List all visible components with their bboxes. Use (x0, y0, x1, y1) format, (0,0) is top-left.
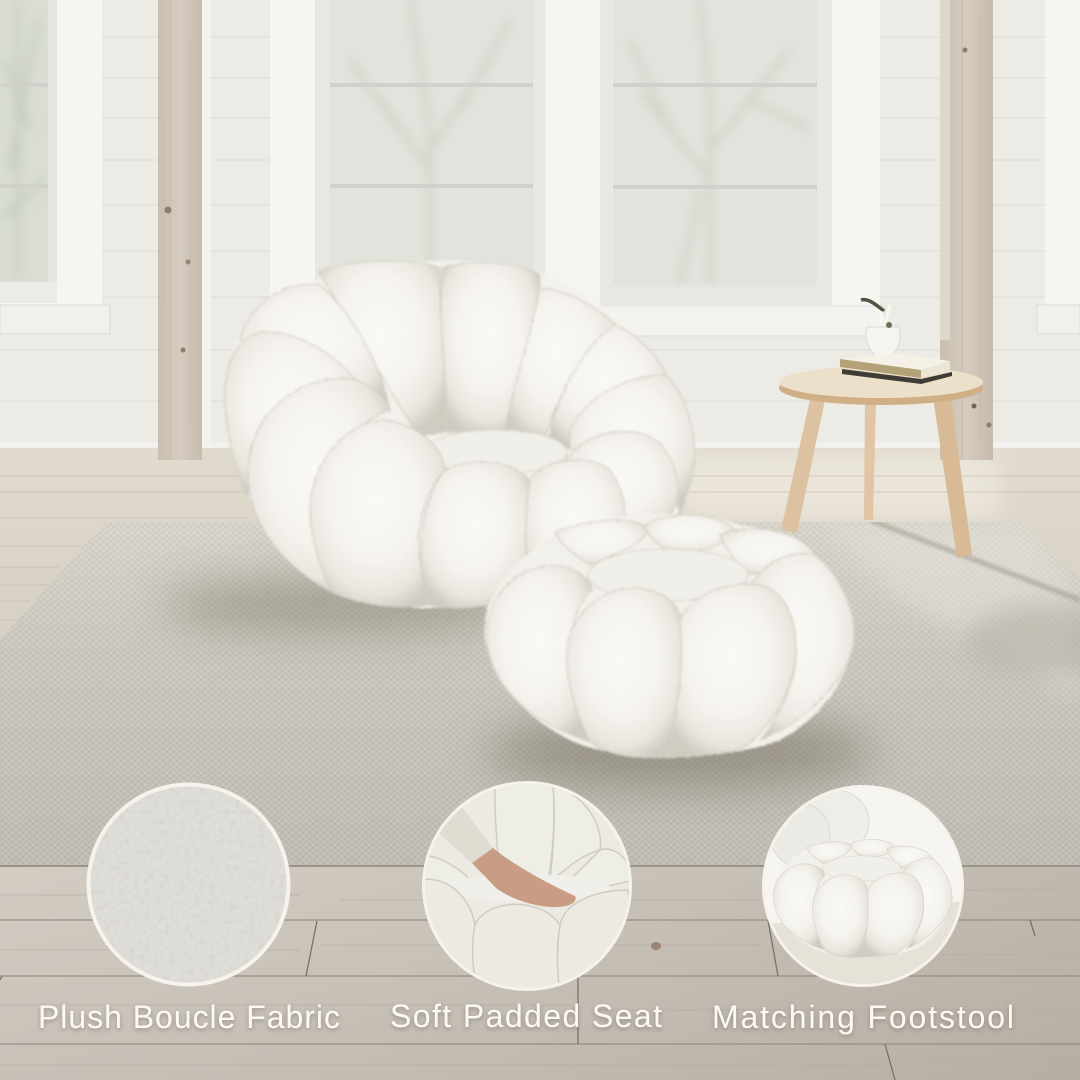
hand (472, 848, 576, 907)
textured area rug (0, 520, 1080, 867)
wall with horizontal planks (0, 0, 1080, 448)
table top (779, 366, 983, 405)
center double window (270, 0, 885, 336)
left wooden beam (158, 0, 211, 460)
rug shadow at right (965, 604, 1080, 676)
left window (0, 0, 110, 334)
footstool (485, 514, 854, 758)
table legs (781, 395, 972, 558)
caption: Soft Padded Seat: Soft Padded Seat (390, 998, 662, 1034)
detail circle: matching footstool (760, 785, 970, 990)
detail circle: boucle fabric (85, 780, 295, 990)
armchair (225, 261, 695, 608)
floor knot (651, 942, 661, 950)
wooden floor (0, 448, 1080, 1080)
back petals (225, 261, 695, 592)
front petals (310, 420, 626, 608)
chair shadow (160, 577, 520, 633)
right wooden beam (940, 0, 993, 460)
detail circle: padded seat with hand (420, 780, 640, 1000)
books (840, 353, 952, 384)
right window (1037, 0, 1080, 334)
sleeve (438, 807, 493, 863)
caption: Matching Footstool: Matching Footstool (712, 999, 1014, 1035)
footstool shadow (485, 714, 875, 790)
tree silhouettes seen through glass (350, 0, 810, 285)
side table with vase and books (779, 300, 983, 558)
table leg shadow (870, 520, 1080, 600)
sunlight on rug (842, 524, 1080, 692)
seat cushion (423, 430, 567, 474)
vase with plant (861, 300, 900, 358)
chair body silhouette (225, 261, 694, 608)
caption: Plush Boucle Fabric: Plush Boucle Fabric (38, 999, 340, 1035)
